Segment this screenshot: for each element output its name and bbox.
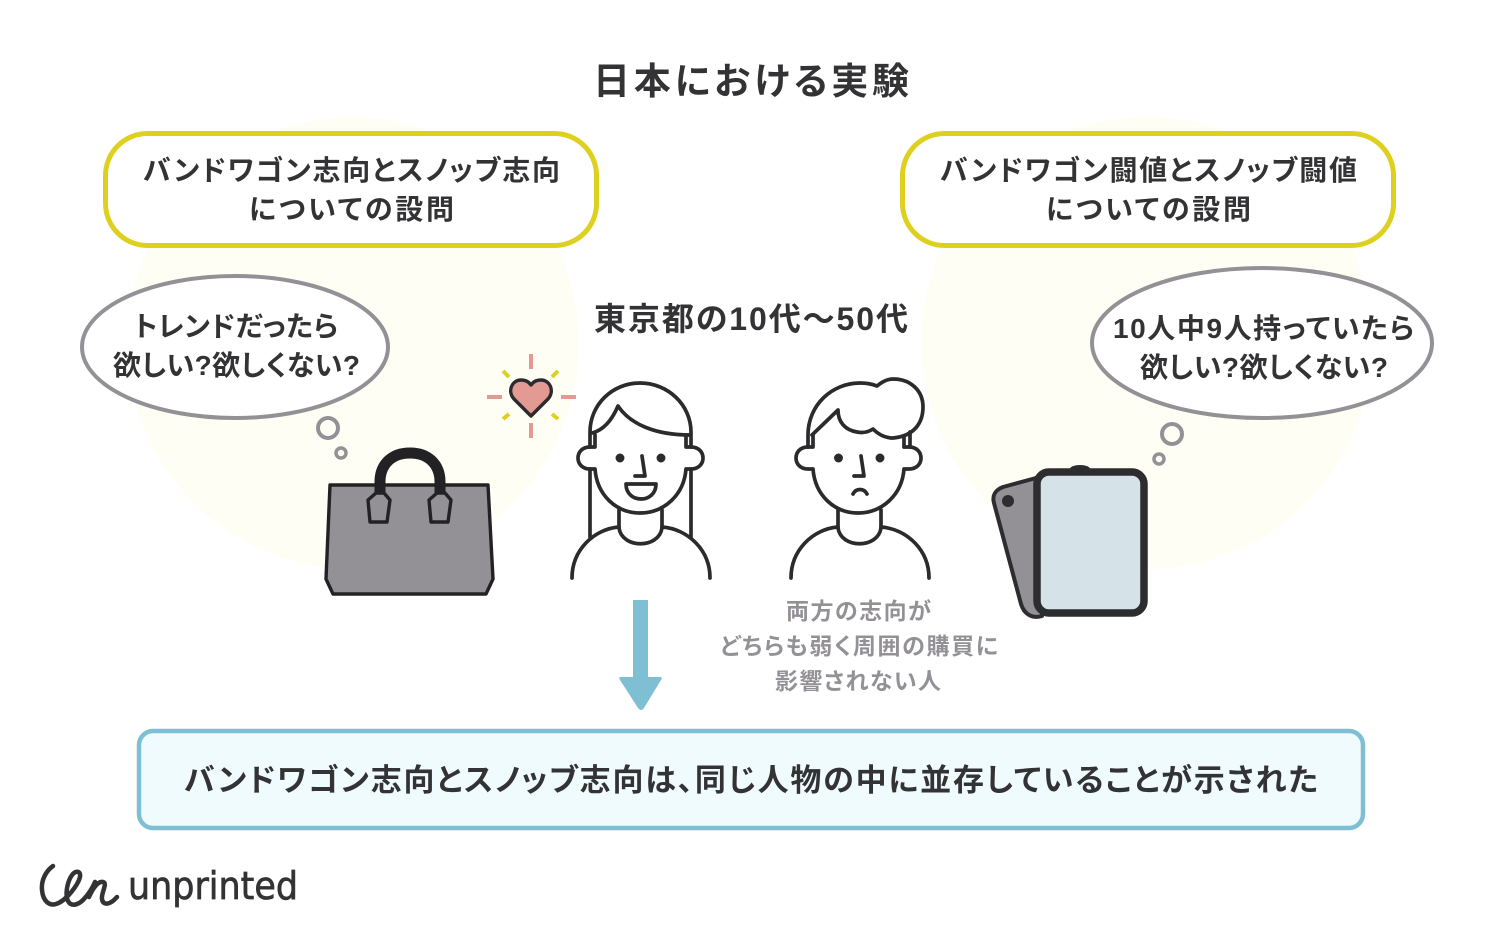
panel: bandwagon and snob orientation questions [106, 134, 596, 246]
thought bubble left [82, 276, 388, 458]
panel: bandwagon and snob threshold questions: についての設問 [1046, 194, 1251, 225]
conclusion box: バンドワゴン志向とスノッブ志向は、同じ人物の中に並存していることが示された [184, 763, 1318, 798]
thought bubble right: 10人中9人持っていたら [1113, 313, 1414, 344]
logo: unprinted: unprinted [128, 864, 298, 908]
subject label: 東京都の10代～50代 [594, 301, 908, 337]
caption: people unaffected [720, 598, 998, 694]
caption: people unaffected: どちらも弱く周囲の購買に [720, 633, 998, 659]
background circle right [921, 117, 1373, 569]
thought bubble right: 欲しい?欲しくない? [1140, 352, 1388, 383]
thought bubble right [1092, 268, 1432, 464]
panel: bandwagon and snob orientation questions: についての設問 [249, 194, 454, 225]
background circle left [127, 117, 579, 569]
title: 日本における実験 [593, 61, 909, 102]
logo: unprinted [42, 864, 298, 908]
panel: bandwagon and snob threshold questions: バンドワゴン闘値とスノッブ闘値 [940, 154, 1357, 186]
panel: bandwagon and snob threshold questions [902, 134, 1394, 246]
icon: heart with rays [487, 354, 576, 438]
panel: bandwagon and snob orientation questions: バンドワゴン志向とスノッブ志向 [143, 154, 560, 186]
icon: tablets [993, 465, 1144, 617]
icon: man frowning [791, 379, 929, 578]
caption: people unaffected: 影響されない人 [775, 668, 941, 694]
conclusion box [139, 731, 1363, 828]
arrow down [619, 600, 662, 710]
thought bubble left: 欲しい?欲しくない? [113, 350, 360, 381]
caption: people unaffected: 両方の志向が [786, 598, 931, 624]
icon: woman smiling [572, 383, 710, 578]
thought bubble left: トレンドだったら [134, 311, 338, 342]
icon: handbag [326, 453, 493, 594]
